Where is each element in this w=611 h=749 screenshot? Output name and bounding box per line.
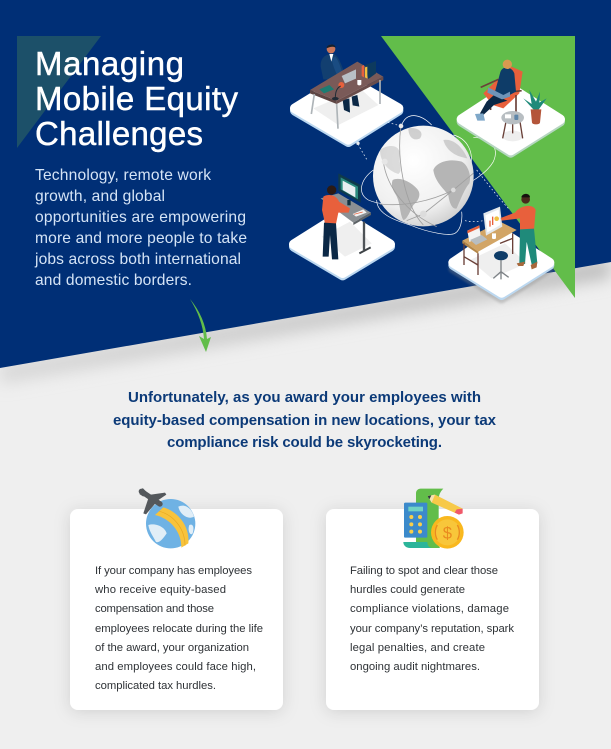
diagonal shadow below header (0, 258, 611, 384)
intro paragraph: Technology, remote work (35, 167, 211, 184)
card text: who receive equity-based (94, 584, 226, 596)
workstation: man in suit at desk (295, 44, 398, 142)
panel: relocation card (70, 488, 283, 710)
title (35, 45, 238, 152)
card text: employees relocate during the life (95, 623, 263, 635)
workstation: person at standing desk (294, 173, 390, 275)
workstation: woman in armchair with laptop (462, 60, 560, 153)
card text: hurdles could generate (350, 584, 465, 596)
card text: compensation and those (95, 603, 214, 615)
arrow: green curved down arrow (190, 299, 211, 352)
icon: calculator, document, pencil and coin (403, 489, 464, 549)
intro paragraph: jobs across both international (34, 251, 241, 268)
teal accent triangle (17, 36, 101, 148)
workstation: person presenting at table (453, 194, 549, 298)
icon: plane and globe (139, 488, 195, 548)
intro paragraph: more and more people to take (35, 230, 247, 247)
card text (350, 565, 514, 673)
intro paragraph: opportunities are empowering (35, 209, 246, 226)
subheading: Unfortunately, as you award your employees with (128, 389, 481, 406)
card text: Failing to spot and clear those (350, 565, 498, 577)
card text: complicated tax hurdles. (95, 680, 216, 692)
navy header panel (0, 0, 611, 368)
title: Mobile Equity (35, 80, 238, 117)
card text: legal penalties, and create (350, 642, 485, 654)
title: Managing (35, 45, 184, 82)
card text: If your company has employees (95, 565, 252, 577)
intro paragraph (34, 167, 247, 289)
subheading (113, 389, 497, 451)
card text: compliance violations, damage (350, 603, 509, 615)
orbit lines behind globe (357, 116, 510, 234)
intro paragraph: and domestic borders. (35, 272, 192, 289)
icon: calculator, document, pencil and coin: $ (443, 523, 452, 542)
card text: ongoing audit nightmares. (350, 661, 480, 673)
subheading: compliance risk could be skyrocketing. (167, 434, 442, 451)
subheading: equity-based compensation in new locations, your tax (113, 412, 497, 429)
globe (356, 124, 474, 227)
card text (94, 565, 263, 692)
card text: of the award, your organization (95, 642, 249, 654)
card text: and employees could face high, (95, 661, 256, 673)
illustration: remote workers around a globe (294, 44, 560, 298)
card text: your company’s reputation, spark (350, 623, 514, 635)
intro paragraph: growth, and global (35, 188, 165, 205)
title: Challenges (35, 115, 203, 152)
green accent triangle (381, 36, 575, 298)
panel: compliance card (326, 489, 539, 710)
